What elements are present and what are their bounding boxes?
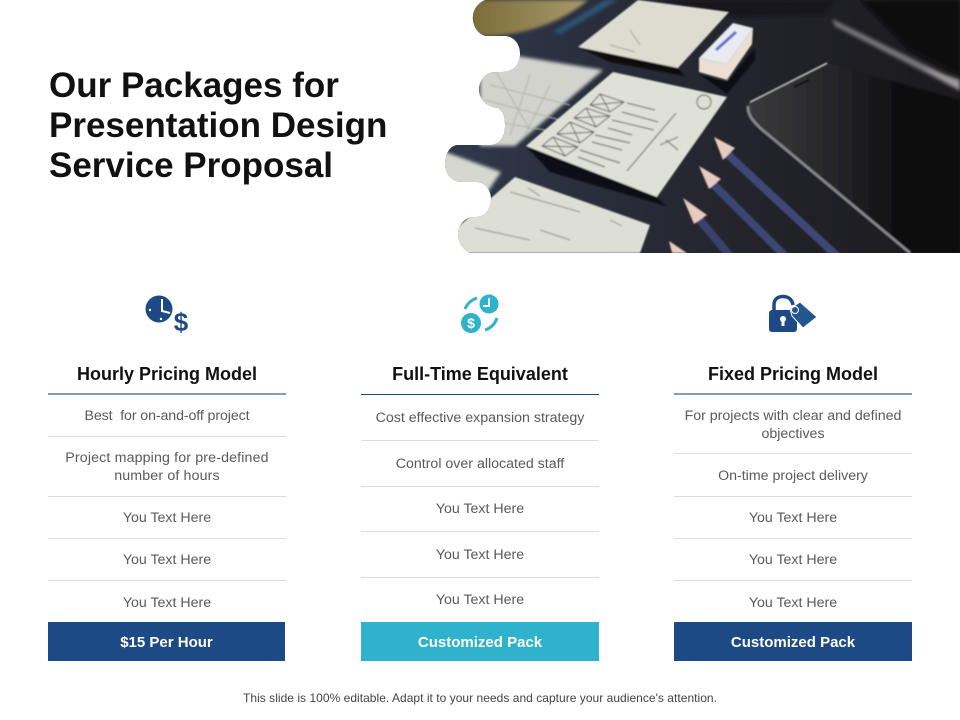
top paper [578,47,685,76]
dark top area [655,0,835,18]
column: Fixed Pricing Model [674,294,912,661]
text rows: You Text Here [123,552,211,568]
brass object [470,0,588,36]
title: Service Proposal [49,146,333,185]
text rows [674,408,912,611]
text rows: Project mapping for pre-defined [65,450,269,466]
lower left paper [445,150,503,193]
icon: clock and dollar exchange [461,294,498,333]
text rows [48,408,286,611]
text rows: Best for on-and-off project [85,408,249,424]
icon: padlock with price tag [769,294,816,332]
text rows: You Text Here [123,595,211,611]
column: Hourly Pricing Model [48,296,286,661]
knife blade [832,19,960,91]
pencils [693,150,837,256]
text rows: You Text Here [436,592,524,608]
heading: Full-Time Equivalent [392,364,568,384]
text rows: number of hours [114,468,220,484]
icon: clock with dollar sign [146,296,189,337]
text rows: You Text Here [436,501,524,517]
package button: Customized Pack [731,634,855,651]
left paper lines [485,70,570,135]
footer note: This slide is 100% editable. Adapt it to your needs and capture your audience's attention. [243,691,717,705]
title [49,66,387,185]
package button [361,622,599,661]
text rows: Cost effective expansion strategy [376,410,584,426]
phone [747,63,960,253]
photo: desk with wireframe sketches, pencils and phone [445,0,960,253]
price button [48,622,285,661]
heading: Hourly Pricing Model [77,364,257,384]
price button: $15 Per Hour [120,634,213,651]
icon: clock and dollar exchange: $ [467,315,475,331]
text rows: You Text Here [749,552,837,568]
icon: clock with dollar sign: $ [174,307,189,337]
left sketch paper [480,50,603,146]
column: Full-Time Equivalent [361,294,599,661]
text rows: Control over allocated staff [396,456,564,472]
lower paper [450,177,650,253]
text rows [361,410,599,608]
text rows: You Text Here [123,510,211,526]
text rows: You Text Here [749,595,837,611]
text rows: You Text Here [749,510,837,526]
package button: Customized Pack [418,634,542,651]
text rows: For projects with clear and defined [685,408,901,424]
title: Presentation Design [49,106,387,145]
heading: Fixed Pricing Model [708,364,878,384]
text rows: On-time project delivery [718,468,868,484]
text rows: You Text Here [436,547,524,563]
text rows: objectives [761,426,825,442]
eraser [699,48,755,94]
package button [674,622,912,661]
title: Our Packages for [49,66,339,105]
main wireframe paper [526,146,666,206]
